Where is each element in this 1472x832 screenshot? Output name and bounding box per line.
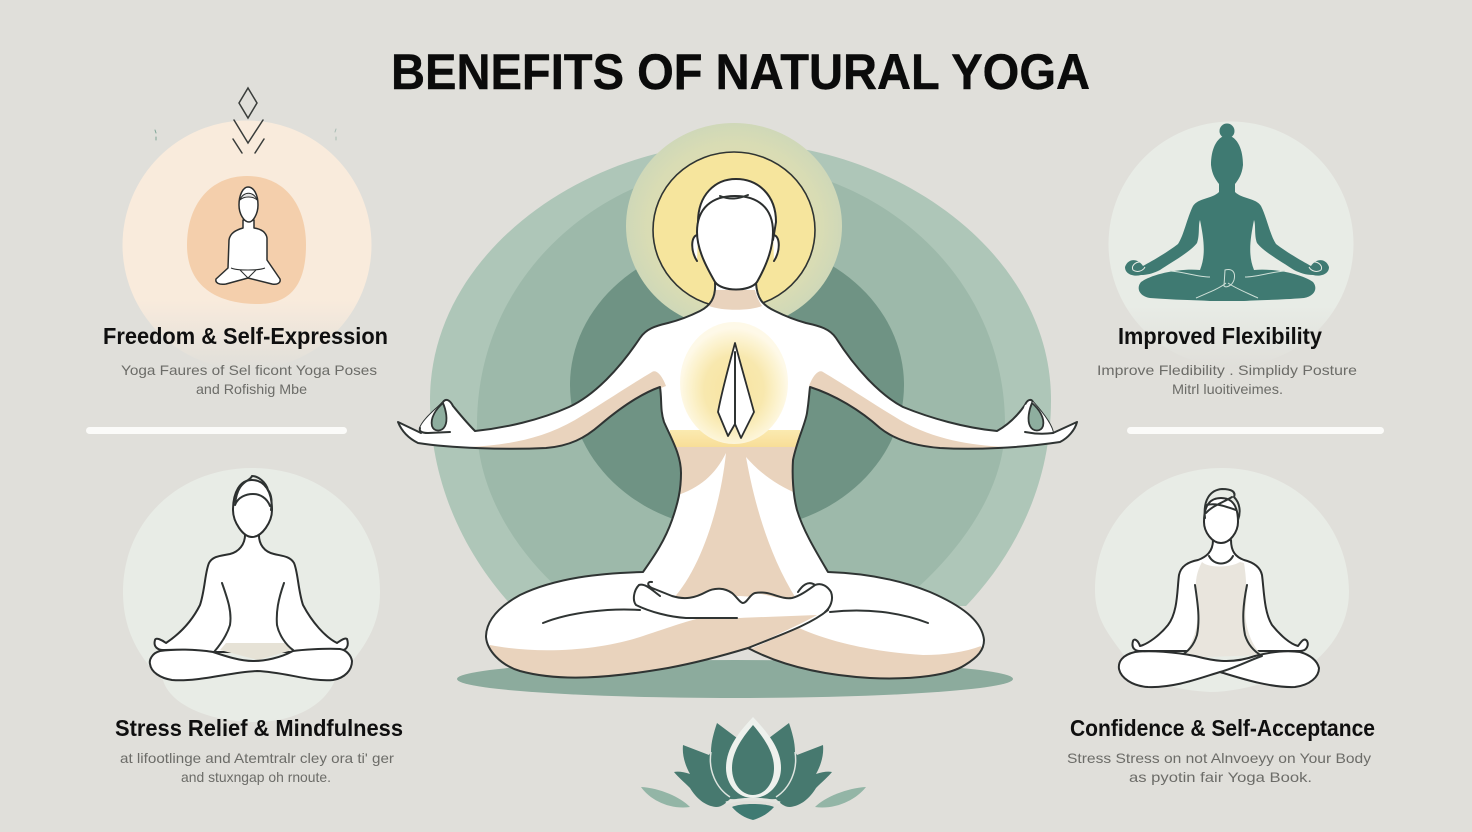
icon: pale circle backdrop	[1108, 122, 1354, 366]
panel: freedom and self-expression	[103, 88, 388, 397]
heading: Stress Relief & Mindfulness	[115, 715, 403, 741]
text block: Mitrl luoitiveimes.	[1172, 381, 1283, 397]
chest glow	[670, 322, 800, 447]
icon: teal seated silhouette	[1125, 124, 1329, 301]
petal separators	[710, 752, 796, 797]
praying hands	[718, 343, 754, 438]
ground shadow ellipse	[457, 660, 1013, 698]
text block: as pyotin fair Yoga Book.	[1129, 769, 1312, 785]
halo ring	[653, 152, 815, 308]
text block	[120, 750, 394, 785]
icon: diamond and chevrons ornament	[155, 88, 336, 153]
heading: Improved Flexibility	[1118, 323, 1322, 349]
text block: Stress Stress on not Alnvoeyy on Your Body	[1067, 750, 1371, 766]
central petal	[726, 717, 781, 798]
icon: small seated figure	[216, 187, 280, 284]
body shading	[470, 290, 1005, 690]
halo glow	[626, 123, 842, 329]
divider left	[86, 427, 347, 434]
text block: at lifootlinge and Atemtralr cley ora ti' ger	[120, 750, 394, 766]
middle green arch	[477, 165, 1005, 590]
icon: pale blob backdrop	[123, 468, 380, 722]
icon: outlined seated figure with beige top	[1119, 489, 1319, 687]
text block	[121, 362, 377, 397]
left mudra hand	[420, 402, 455, 434]
text block: Yoga Faures of Sel ficont Yoga Poses	[121, 362, 377, 378]
white arc over base	[726, 799, 780, 803]
text block: and stuxngap oh rnoute.	[181, 769, 331, 785]
panel: central meditating figure	[398, 123, 1077, 698]
side leaves	[641, 787, 690, 808]
panel: stress relief and mindfulness	[115, 468, 403, 785]
head with hair	[692, 179, 779, 290]
outer green arch	[430, 143, 1051, 606]
leg crossing lines	[543, 610, 928, 648]
panel: confidence and self-acceptance	[1067, 468, 1375, 785]
title: BENEFITS OF NATURAL YOGA	[391, 44, 1090, 100]
icon: peach circle backdrop	[122, 120, 372, 370]
icon: lotus flower	[641, 717, 866, 820]
left petals	[674, 723, 753, 807]
heading: Confidence & Self-Acceptance	[1070, 715, 1375, 741]
lap hands and waist line	[634, 582, 832, 618]
right mudra hand	[1021, 402, 1053, 434]
inner dark green circle	[570, 240, 904, 530]
figure body outline	[398, 283, 1077, 678]
text block: and Rofishig Mbe	[196, 381, 307, 397]
divider right	[1127, 427, 1384, 434]
base	[732, 804, 774, 820]
heading: Freedom & Self-Expression	[103, 323, 388, 349]
text block	[1067, 750, 1371, 785]
icon: peach inner blob	[187, 176, 306, 304]
figure body silhouette	[398, 283, 1077, 678]
text block	[1097, 362, 1357, 397]
text block: Improve Fledibility . Simplidy Posture	[1097, 362, 1357, 378]
icon: outlined seated figure	[150, 476, 352, 680]
right petals	[753, 723, 832, 807]
panel: improved flexibility	[1097, 122, 1357, 397]
icon: pale circle backdrop	[1095, 468, 1349, 692]
